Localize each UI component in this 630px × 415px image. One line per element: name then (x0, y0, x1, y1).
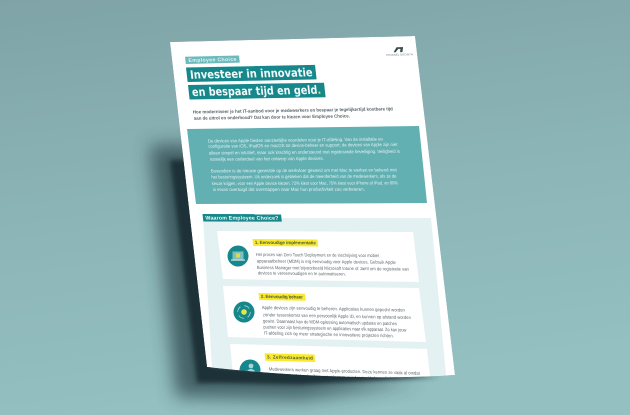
card 2 text (262, 305, 412, 338)
card 2 text: zonder tussenkomst van een persoonlijk Apple ID, en kunnen op afstand worden (263, 312, 412, 320)
card 2 text: gewist. Daarnaast kan de MDM-oplossing automatisch updates en patches (263, 319, 398, 326)
panel text (208, 137, 401, 192)
icon: laptop (228, 246, 248, 266)
logo: CHANNEL GROWTH (386, 52, 413, 57)
intro text: aan de uitrol en onderhoud? Dat kan door te kiezen voor Employee Choice. (194, 113, 350, 121)
panel text: het besturingssysteem. Uit onderzoek is gebleken dat de meerderheid van de medewerkers, als ze de (211, 174, 397, 179)
panel: Waarom Employee Choice (202, 214, 447, 385)
logo (386, 47, 413, 56)
card 1 text: devices te vereenvoudigen en te automatiseren. (258, 271, 346, 277)
document page (170, 36, 455, 385)
panel text: Bovendien is de nieuwe generatie op de werkvloer gewend om met Mac te werken en bekend met (211, 167, 398, 173)
card 2 text: pushen voor zijn besturingssysteem en applicaties naar elk apparaat. Zo kan jouw (263, 325, 407, 333)
label: step 1: 1. Eenvoudige implementatie (255, 240, 317, 245)
card 1 text: apparaatbeheer (MDM) is erg eenvoudig voor Apple devices. Gebruik Apple (257, 259, 396, 265)
panel text: is ervan overtuigd dat overstappen naar Mac hun productiviteit zou verbeteren. (213, 187, 365, 192)
card 3 text: ze deze ook privé gebruiken, waardoor ze minder snel hulp nodig hebben van IT (269, 373, 417, 382)
label: step 1 (252, 239, 318, 246)
title line 1: Investeer in innovatie (189, 65, 313, 82)
icon: orbit (234, 302, 254, 322)
card 3 text: Medewerkers werken graag met Apple-producten. Deze kennen ze vaak al omdat (269, 367, 421, 376)
card 1 text (256, 252, 409, 277)
icon: support person (240, 360, 260, 372)
intro text: Hoe moderniseer je het IT-aanbod voor je medewerkers en bespaar je tegelijkertijd kostbare tijd (193, 106, 393, 114)
intro text (193, 107, 393, 120)
panel text: alleen simpel en intuïtief, maar ook krachtig en ondersteund met ingebouwde beveiliging. Veiligheid is (209, 149, 401, 155)
card 2 (223, 286, 426, 342)
title (186, 65, 326, 100)
card 1 text: Het proces van Zero Touch Deployment en de inschrijving voor mobiel (256, 252, 379, 258)
heading: Waarom Employee Choice: Waarom Employee Choice? (205, 216, 279, 222)
card 2 text: Apple devices zijn eenvoudig te beheren. Applicaties kunnen gepusht worden (262, 305, 406, 313)
label: step 3: 3. Zelfredzaamheid (267, 354, 313, 361)
card 1 text: Business Manager met bijvoorbeeld Microsoft Intune of Jamf om de registratie van (257, 265, 409, 272)
panel text: configuratie van iOS, iPadOS en macOS tot device-beheer en support: de devices van Apple zijn niet (208, 142, 398, 149)
panel text: De devices van Apple bieden aanzienlijke voordelen voor je IT-afdeling. Van de installatie en (208, 137, 384, 143)
label: step 2 (258, 293, 306, 301)
card 3 (230, 344, 430, 378)
panel text: namelijk een onderdeel van het ontwerp van Apple devices. (210, 156, 324, 162)
title line 2: en bespaar tijd en geld. (191, 83, 322, 99)
label: step 2: 2. Eenvoudig beheer (261, 294, 303, 300)
card 1 (217, 231, 419, 282)
page shadow (150, 145, 440, 400)
tag: Employee Choice: Employee Choice (188, 57, 237, 64)
card 2 text: IT-afdeling zich op meer strategische en innovatieve projecten richten. (264, 331, 394, 338)
label: step 3 (264, 353, 315, 362)
panel: intro (187, 126, 427, 204)
panel text: keuze krijgen, voor een Apple device kiezen. 72% kiest voor Mac, 75% kiest voor iPhone of iPad, en 80% (212, 180, 398, 186)
